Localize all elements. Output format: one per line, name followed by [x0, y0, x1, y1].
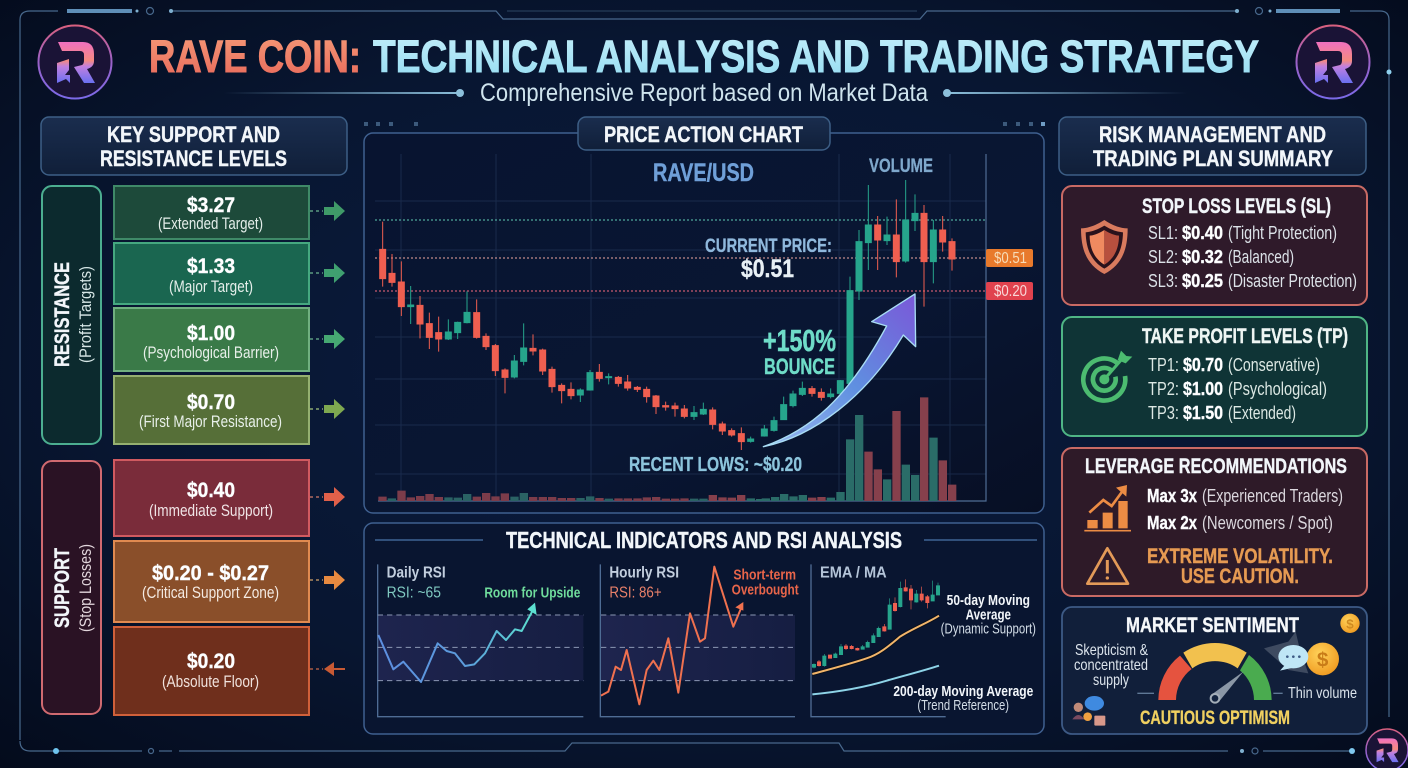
- chart: EMA / MA: (Trend Reference): [917, 697, 1009, 714]
- card: market sentiment: concentrated: [1074, 657, 1148, 674]
- level: $1.33: $1.33: [187, 255, 235, 278]
- resistance sidebar: (Profit Targets): [76, 266, 95, 363]
- callout: recent lows: RECENT LOWS: ~$0.20: [629, 454, 802, 476]
- card: market sentiment: Thin volume: [1288, 685, 1357, 702]
- price tag: $0.20: $0.20: [994, 283, 1027, 300]
- chart: EMA / MA: 200-day Moving Average: [893, 683, 1033, 700]
- callout: +150% bounce: +150%: [763, 323, 836, 358]
- card: take profit levels: (Conservative): [1228, 355, 1320, 375]
- level: $1.33: (Major Target): [169, 277, 253, 296]
- card: leverage recommendations: Max 2x: [1147, 513, 1197, 533]
- volume bars: [378, 397, 956, 501]
- card: market sentiment: Skepticism &: [1075, 642, 1148, 659]
- level: $0.20: $0.20: [187, 650, 235, 673]
- icon: growth chart: [1084, 485, 1131, 531]
- card: stop loss levels: [1062, 186, 1367, 305]
- resistance sidebar: RESISTANCE: [51, 262, 74, 367]
- card: market sentiment: [1062, 607, 1367, 734]
- title: RAVE COIN:: [149, 31, 361, 82]
- price tag: $0.51: $0.51: [994, 250, 1027, 267]
- chart: EMA / MA: [811, 564, 1036, 717]
- chart: daily RSI: Room for Upside: [484, 584, 580, 601]
- level: $0.20: (Absolute Floor): [162, 672, 259, 691]
- chart: hourly RSI: Overbought: [732, 581, 799, 598]
- callout: +150% bounce: [763, 323, 836, 379]
- chart: hourly RSI: RSI: 86+: [609, 584, 662, 601]
- level: $1.00: $1.00: [187, 322, 235, 345]
- heading: key support and resistance levels: RESISTANCE LEVELS: [100, 146, 287, 171]
- level: $1.00: [114, 308, 309, 371]
- card: stop loss levels: SL1:: [1148, 223, 1178, 243]
- card: take profit levels: $1.50: [1183, 403, 1223, 423]
- arrows: resistance levels: [310, 201, 345, 419]
- callout: current price: $0.51: [741, 255, 794, 283]
- level: $3.27: (Extended Target): [158, 214, 263, 233]
- price levels: dotted lines: [375, 220, 986, 291]
- heading: price action chart: PRICE ACTION CHART: [604, 122, 803, 147]
- icon: people and chat: [1072, 696, 1105, 726]
- heading: risk management: TRADING PLAN SUMMARY: [1093, 146, 1333, 171]
- card: stop loss levels: $0.40: [1182, 223, 1223, 243]
- card: leverage recommendations: [1062, 448, 1367, 596]
- card: stop loss levels: SL3:: [1148, 271, 1178, 291]
- panel: price action chart: [364, 117, 1044, 513]
- card: take profit levels: (Extended): [1228, 403, 1296, 423]
- level: $0.20 - $0.27: (Critical Support Zone): [142, 583, 279, 602]
- heading: key support and resistance levels: KEY SUPPORT AND: [107, 122, 280, 147]
- chart: EMA / MA: (Dynamic Support): [941, 620, 1036, 637]
- card: leverage recommendations: EXTREME VOLATILITY.: [1147, 545, 1333, 568]
- card: leverage recommendations: (Newcomers / Spot): [1202, 513, 1333, 533]
- level: $0.20: [114, 627, 309, 715]
- card: take profit levels: $0.70: [1183, 355, 1223, 375]
- card: take profit levels: TP2:: [1148, 379, 1179, 399]
- chart grid: [375, 154, 986, 501]
- card: stop loss levels: (Tight Protection): [1228, 223, 1337, 243]
- icon: small coin: [1340, 614, 1360, 633]
- chart: daily RSI: Daily RSI: [387, 565, 446, 582]
- card: stop loss levels: (Disaster Protection): [1228, 271, 1357, 291]
- icon: warning triangle: [1087, 548, 1128, 584]
- icon: target: [1083, 351, 1132, 401]
- icon: small coin: $: [1346, 616, 1354, 631]
- card: market sentiment: MARKET SENTIMENT: [1126, 614, 1299, 637]
- level: $0.70: [114, 376, 309, 444]
- card: leverage recommendations: USE CAUTION.: [1181, 565, 1299, 588]
- callout: current price: CURRENT PRICE:: [705, 236, 832, 257]
- callout: +150% bounce: BOUNCE: [764, 354, 835, 379]
- support sidebar: SUPPORT: [51, 548, 74, 628]
- level: $0.70: $0.70: [187, 391, 235, 414]
- candlesticks: [380, 180, 955, 450]
- level: $1.00: (Psychological Barrier): [143, 343, 279, 362]
- callout: current price: [705, 236, 832, 283]
- card: market sentiment: supply: [1093, 672, 1129, 689]
- card: stop loss levels: (Balanced): [1228, 247, 1294, 267]
- resistance sidebar: [42, 186, 101, 444]
- card: stop loss levels: $0.32: [1182, 247, 1223, 267]
- card: stop loss levels: SL2:: [1148, 247, 1178, 267]
- icon: bottom right R logo: [1366, 729, 1408, 768]
- level: $0.20 - $0.27: [114, 541, 309, 622]
- support sidebar: [42, 461, 101, 714]
- icon: chat and coin: $: [1317, 649, 1329, 672]
- chart: EMA / MA: EMA / MA: [820, 565, 887, 582]
- chart label: volume: VOLUME: [869, 156, 933, 177]
- arrow: bounce: [763, 294, 916, 447]
- arrows: support levels: [310, 487, 345, 676]
- card: take profit levels: TP1:: [1148, 355, 1179, 375]
- panel: risk management and trading plan: [1059, 117, 1367, 734]
- chart: hourly RSI: Short-term: [733, 566, 796, 583]
- card: take profit levels: TP3:: [1148, 403, 1179, 423]
- chart: daily RSI: [378, 564, 583, 717]
- level: $3.27: [114, 186, 309, 239]
- card: market sentiment: CAUTIOUS OPTIMISM: [1140, 708, 1290, 729]
- chart: hourly RSI: Hourly RSI: [609, 565, 679, 582]
- icon: chat and coin: [1264, 632, 1339, 675]
- card: take profit levels: TAKE PROFIT LEVELS (TP): [1142, 325, 1348, 348]
- heading: key support and resistance levels: [41, 117, 347, 175]
- card: leverage recommendations: (Experienced Traders): [1202, 486, 1343, 506]
- chart: daily RSI: RSI: ~65: [387, 584, 441, 601]
- level: $0.40: (Immediate Support): [149, 501, 273, 520]
- card: take profit levels: (Psychological): [1228, 379, 1327, 399]
- card: stop loss levels: $0.25: [1182, 271, 1223, 291]
- card: take profit levels: [1062, 317, 1367, 436]
- level: $0.20 - $0.27: $0.20 - $0.27: [152, 562, 269, 585]
- panel: technical indicators and RSI analysis: [364, 523, 1044, 734]
- level: $1.33: [114, 243, 309, 304]
- icon: right R logo: [1296, 26, 1370, 98]
- support sidebar: (Stop Losses): [76, 544, 95, 632]
- heading: price action chart: [578, 117, 830, 150]
- subtitle: Comprehensive Report based on Market Data: [480, 79, 928, 107]
- icon: shield: [1081, 220, 1128, 274]
- heading: risk management: RISK MANAGEMENT AND: [1099, 122, 1326, 147]
- level: $3.27: $3.27: [187, 194, 235, 217]
- card: leverage recommendations: Max 3x: [1147, 486, 1197, 506]
- heading: technical indicators: TECHNICAL INDICATORS AND RSI ANALYSIS: [506, 527, 902, 553]
- chart: sentiment gauge: [1137, 643, 1283, 703]
- icon: left R logo: [38, 26, 112, 98]
- level: $0.70: (First Major Resistance): [139, 412, 282, 431]
- level: $0.40: [114, 460, 309, 536]
- chart: EMA / MA: 50-day Moving: [947, 592, 1030, 609]
- card: take profit levels: $1.00: [1183, 379, 1223, 399]
- panel: key support and resistance levels: [41, 117, 347, 715]
- card: stop loss levels: STOP LOSS LEVELS (SL): [1142, 195, 1331, 218]
- subtitle: [224, 79, 1187, 107]
- chart label: pair: RAVE/USD: [653, 159, 754, 187]
- level: $0.40: $0.40: [187, 479, 235, 502]
- chart: EMA / MA: Average: [966, 606, 1011, 623]
- heading: risk management: [1059, 117, 1366, 175]
- chart: hourly RSI: [600, 564, 799, 717]
